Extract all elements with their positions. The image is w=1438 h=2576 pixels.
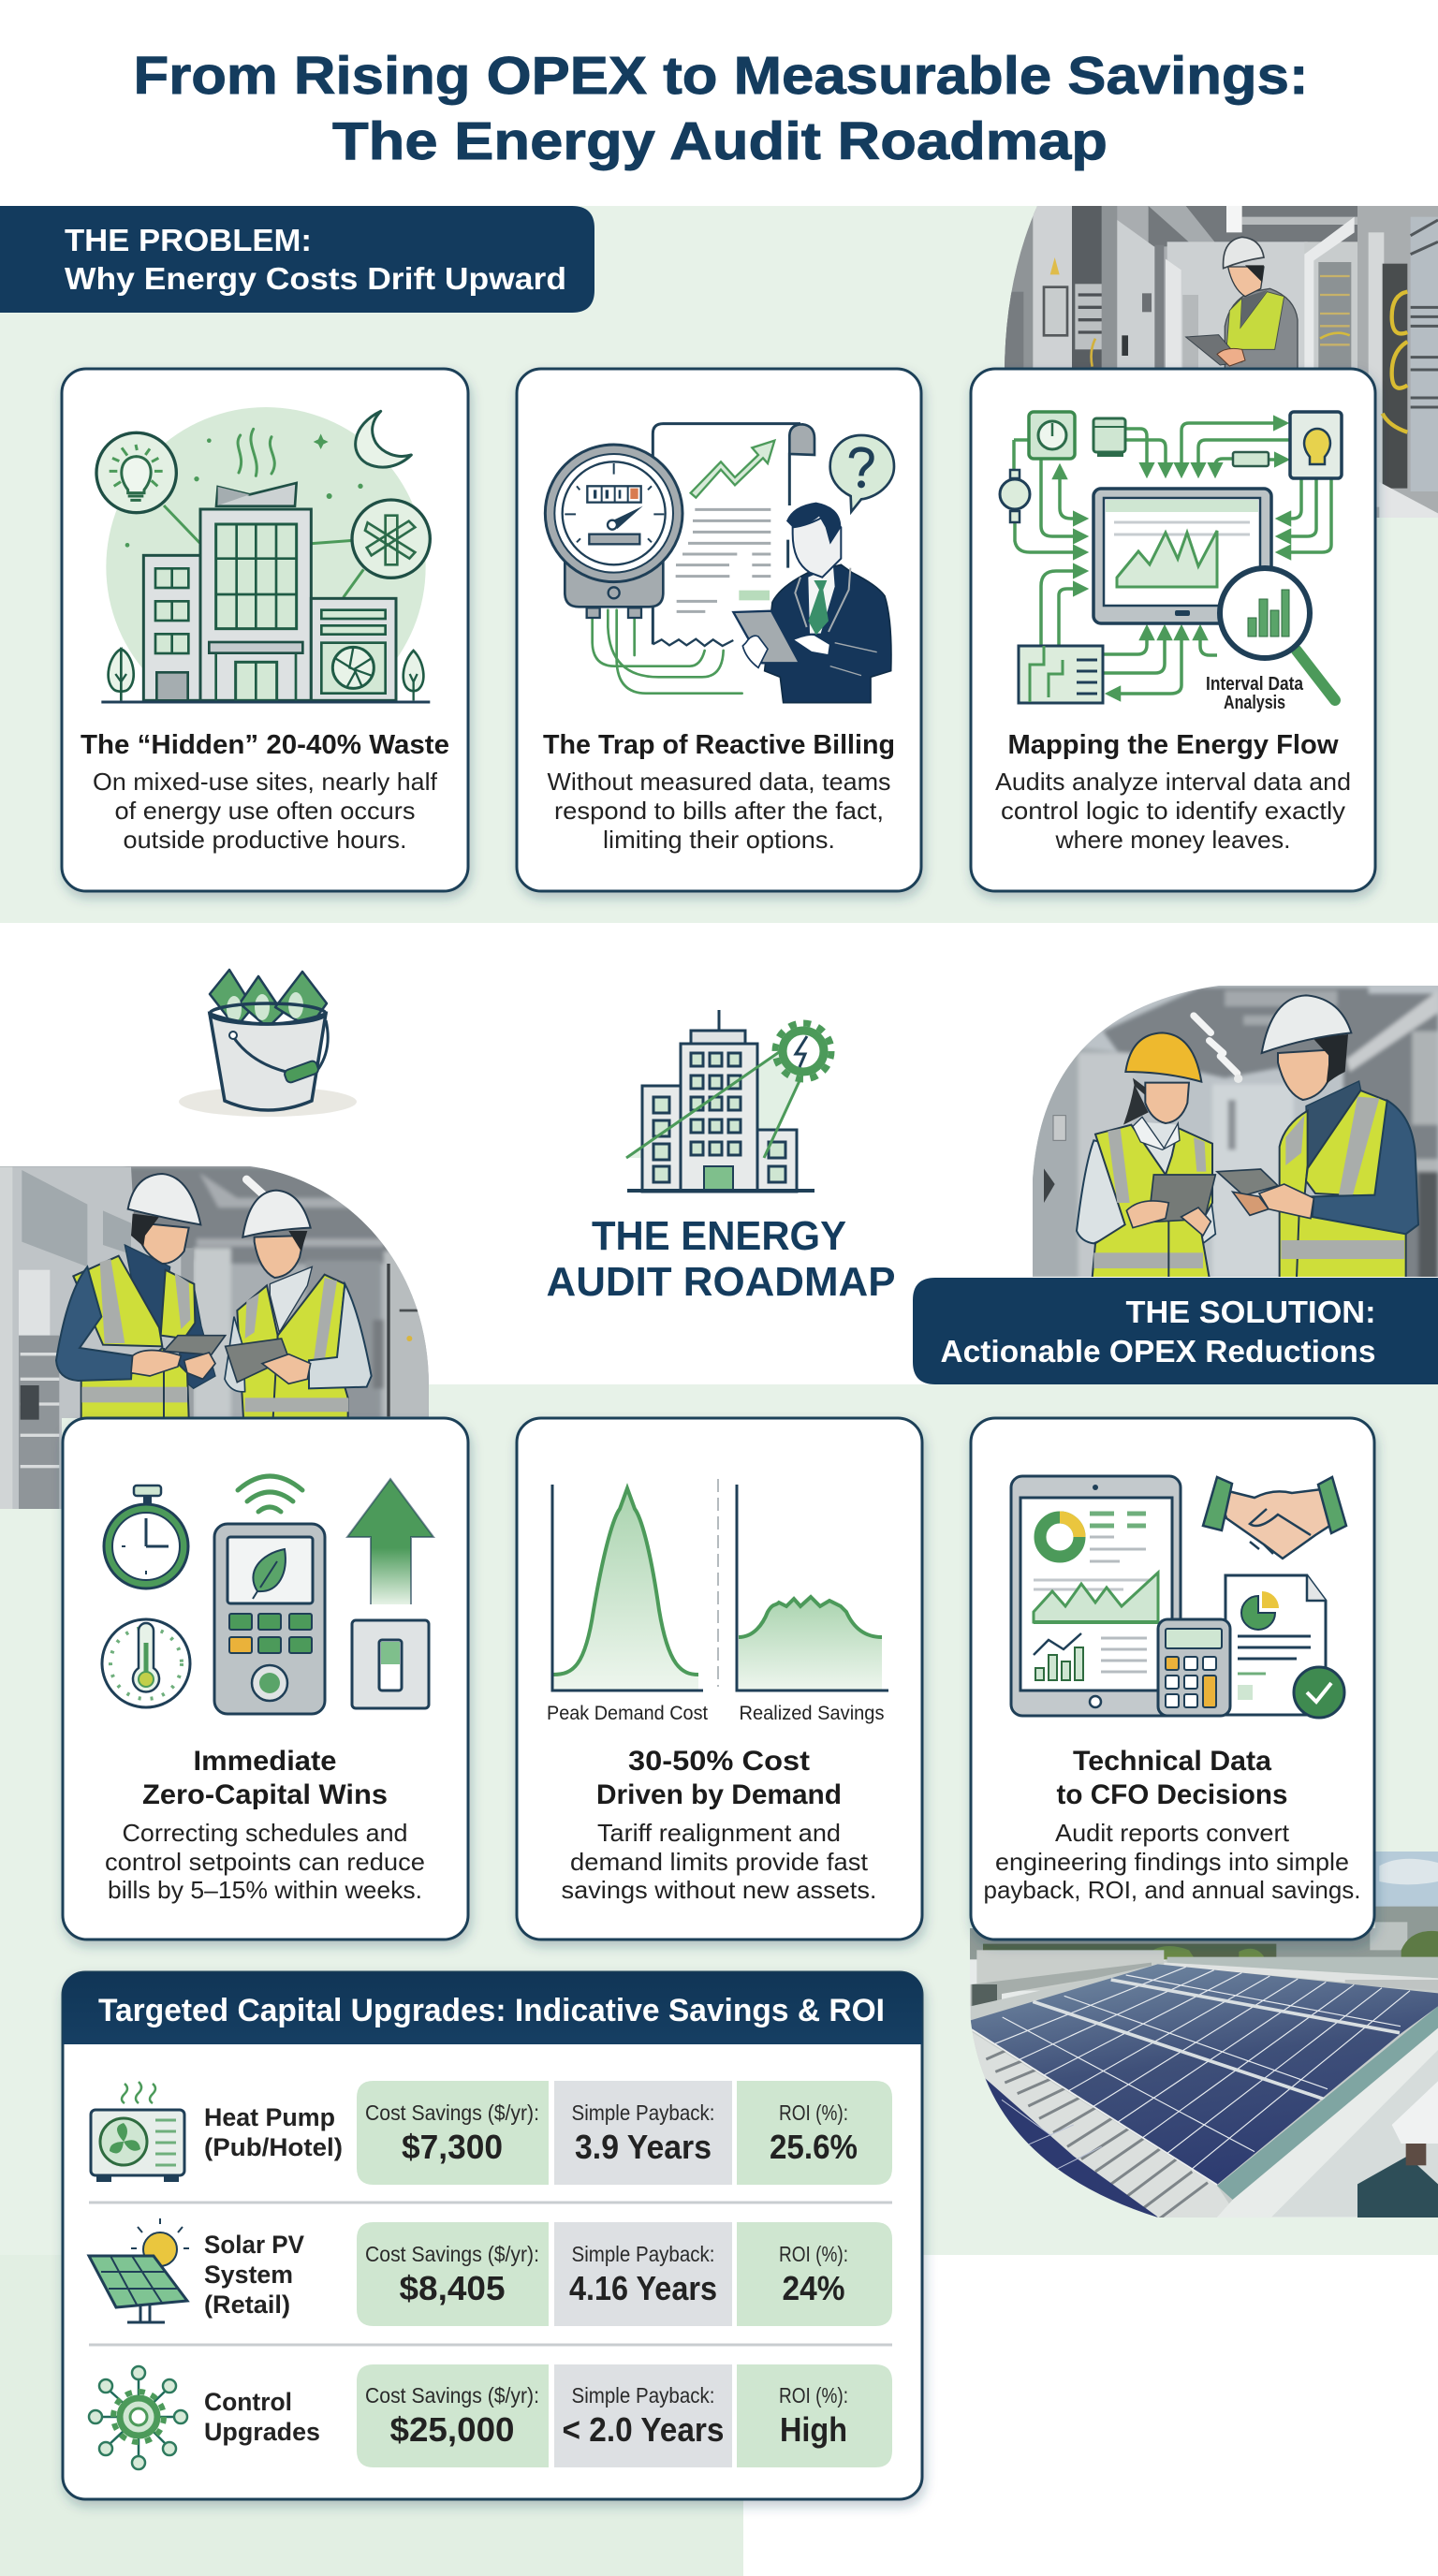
- photo: two auditors with tablets, right: [1025, 978, 1438, 1282]
- title: [133, 46, 1309, 171]
- panel: energy flow: Audits analyze interval data and: [995, 768, 1351, 796]
- icon: building with energy gear: [626, 1010, 831, 1192]
- panel: energy flow: where money leaves.: [1054, 826, 1290, 854]
- row: solar PV: Solar PV: [204, 2231, 304, 2259]
- panel: demand cost: 30-50% Cost: [628, 1746, 810, 1777]
- row: solar PV: System: [204, 2261, 293, 2289]
- panel: energy flow: [971, 369, 1375, 891]
- banner: the problem: Why Energy Costs Drift Upward: [65, 261, 566, 296]
- panel: CFO decisions: payback, ROI, and annual savings.: [983, 1876, 1361, 1904]
- woman auditor: [1077, 1032, 1215, 1278]
- icon: timers, thermostat and switch: [102, 1476, 433, 1714]
- photo: rooftop solar array: [964, 1844, 1438, 2228]
- metric: cost savings: Cost Savings ($/yr):: [365, 2242, 539, 2266]
- metric: cost savings: [357, 2364, 549, 2467]
- metric: cost savings: [357, 2222, 549, 2326]
- heading: energy audit roadmap: THE ENERGY: [592, 1213, 846, 1259]
- panel: zero-capital wins: [63, 1418, 468, 1939]
- title: The Energy Audit Roadmap: [332, 111, 1108, 171]
- metric: ROI: [737, 2222, 892, 2326]
- metric: ROI: 25.6%: [770, 2128, 858, 2166]
- banner: the solution: Actionable OPEX Reductions: [940, 1334, 1376, 1368]
- corrugated strip and lower array: [973, 2033, 1229, 2217]
- row: control upgrades: Upgrades: [204, 2418, 320, 2446]
- metric: simple payback: 4.16 Years: [569, 2269, 717, 2307]
- main solar array: [971, 1964, 1438, 2185]
- chart: peak demand versus realized savings: [547, 1479, 888, 1724]
- panel: hidden waste: of energy use often occurs: [114, 797, 416, 825]
- panel: demand cost: demand limits provide fast: [570, 1848, 869, 1876]
- metric: simple payback: 3.9 Years: [575, 2128, 712, 2166]
- icon: energy flow diagram: Interval Data: [1206, 674, 1304, 695]
- icon: leaky money bucket: [179, 970, 357, 1117]
- panel: zero-capital wins: bills by 5–15% within weeks.: [108, 1876, 422, 1904]
- icon: solar panel and sun: [89, 2218, 189, 2322]
- man auditor: [1262, 995, 1418, 1278]
- photo: engineer in server aisle: [992, 201, 1438, 527]
- metric: ROI: 24%: [783, 2269, 844, 2307]
- metric: cost savings: $8,405: [399, 2269, 506, 2307]
- panel: hidden waste: outside productive hours.: [124, 826, 406, 854]
- icon: energy flow diagram: [1000, 412, 1342, 713]
- metric: cost savings: Cost Savings ($/yr):: [365, 2100, 539, 2125]
- metric: ROI: ROI (%):: [779, 2242, 848, 2266]
- row: solar PV: (Retail): [204, 2291, 290, 2319]
- metric: simple payback: [554, 2222, 732, 2326]
- icon: heat pump: [91, 2082, 184, 2181]
- panel: CFO decisions: Technical Data: [1073, 1746, 1271, 1777]
- row: control upgrades: Control: [204, 2388, 292, 2416]
- panel: demand cost: [517, 1418, 922, 1939]
- panel: targeted capital upgrades table: [63, 1972, 922, 2499]
- panel: CFO decisions: to CFO Decisions: [1056, 1779, 1288, 1810]
- metric: simple payback: [554, 2364, 732, 2467]
- metric: cost savings: [357, 2081, 549, 2185]
- panel: reactive billing: Without measured data, teams: [547, 768, 891, 796]
- panel: CFO decisions: Audit reports convert: [1055, 1819, 1290, 1847]
- panel: reactive billing: The Trap of Reactive Billing: [543, 730, 895, 760]
- banner: the solution: THE SOLUTION:: [1125, 1295, 1376, 1329]
- icon: wasteful building at night: [96, 407, 430, 726]
- table header: [63, 1972, 922, 2044]
- metric: simple payback: Simple Payback:: [571, 2100, 715, 2125]
- worker two: [225, 1191, 372, 1418]
- panel: CFO decisions: engineering findings into simple: [995, 1848, 1349, 1876]
- metric: ROI: ROI (%):: [779, 2100, 848, 2125]
- manager: [733, 503, 891, 703]
- roof edge and wall: [1217, 2006, 1438, 2200]
- metric: ROI: ROI (%):: [779, 2383, 848, 2408]
- metric: ROI: [737, 2081, 892, 2185]
- metric: ROI: [737, 2364, 892, 2467]
- icon: energy flow diagram: Analysis: [1224, 693, 1285, 713]
- panel: reactive billing: limiting their options.: [603, 826, 835, 854]
- metric: simple payback: Simple Payback:: [571, 2383, 715, 2408]
- worker one: [56, 1174, 215, 1418]
- panel: zero-capital wins: Zero-Capital Wins: [142, 1779, 388, 1810]
- panel: energy flow: control logic to identify exactly: [1001, 797, 1345, 825]
- metric: simple payback: [554, 2081, 732, 2185]
- right racks: [1304, 242, 1357, 373]
- row: heat pump: [91, 2081, 892, 2185]
- metric: cost savings: $7,300: [402, 2128, 503, 2166]
- metric: simple payback: Simple Payback:: [571, 2242, 715, 2266]
- panel: demand cost: Tariff realignment and: [597, 1819, 841, 1847]
- heading: energy audit roadmap: [547, 1213, 895, 1305]
- row: heat pump: (Pub/Hotel): [204, 2133, 343, 2161]
- title: From Rising OPEX to Measurable Savings:: [133, 46, 1309, 106]
- banner: the solution: [913, 1278, 1438, 1384]
- engineer: [1186, 237, 1298, 370]
- metric: cost savings: $25,000: [389, 2410, 515, 2449]
- panel: reactive billing: [517, 369, 921, 891]
- row: heat pump: Heat Pump: [204, 2103, 335, 2131]
- panel: reactive billing: respond to bills after the fact,: [554, 797, 884, 825]
- icon: meter, bill and manager: [545, 424, 894, 703]
- panel: CFO decisions: [971, 1418, 1374, 1939]
- table header: Targeted Capital Upgrades: Indicative Savings & ROI: [98, 1993, 885, 2028]
- banner: the problem: [0, 206, 594, 313]
- panel: demand cost: Driven by Demand: [596, 1779, 842, 1810]
- banner: the problem: THE PROBLEM:: [65, 223, 312, 257]
- icon: tablet report, handshake, calculator and document: [1011, 1476, 1346, 1718]
- panel: hidden waste: The “Hidden” 20-40% Waste: [81, 730, 449, 760]
- panel: demand cost: savings without new assets.: [562, 1876, 876, 1904]
- metric: ROI: High: [780, 2410, 847, 2449]
- panel: energy flow: Mapping the Energy Flow: [1007, 730, 1339, 760]
- metric: cost savings: Cost Savings ($/yr):: [365, 2383, 539, 2408]
- row: solar PV: [89, 2218, 892, 2326]
- panel: zero-capital wins: Immediate: [193, 1746, 337, 1777]
- row: control upgrades: [89, 2364, 892, 2469]
- metric: simple payback: < 2.0 Years: [562, 2410, 725, 2449]
- panel: zero-capital wins: Correcting schedules and: [122, 1819, 408, 1847]
- chart: peak demand versus realized savings: Realized Savings: [740, 1703, 884, 1724]
- photo: two auditors with tablets, left: [0, 1161, 440, 1516]
- icon: control network gear: [89, 2366, 187, 2469]
- panel: hidden waste: On mixed-use sites, nearly half: [93, 768, 438, 796]
- chart: peak demand versus realized savings: Peak Demand Cost: [547, 1703, 708, 1724]
- panel: zero-capital wins: control setpoints can reduce: [105, 1848, 425, 1876]
- panel: hidden waste: [62, 369, 468, 891]
- heading: energy audit roadmap: AUDIT ROADMAP: [547, 1259, 895, 1305]
